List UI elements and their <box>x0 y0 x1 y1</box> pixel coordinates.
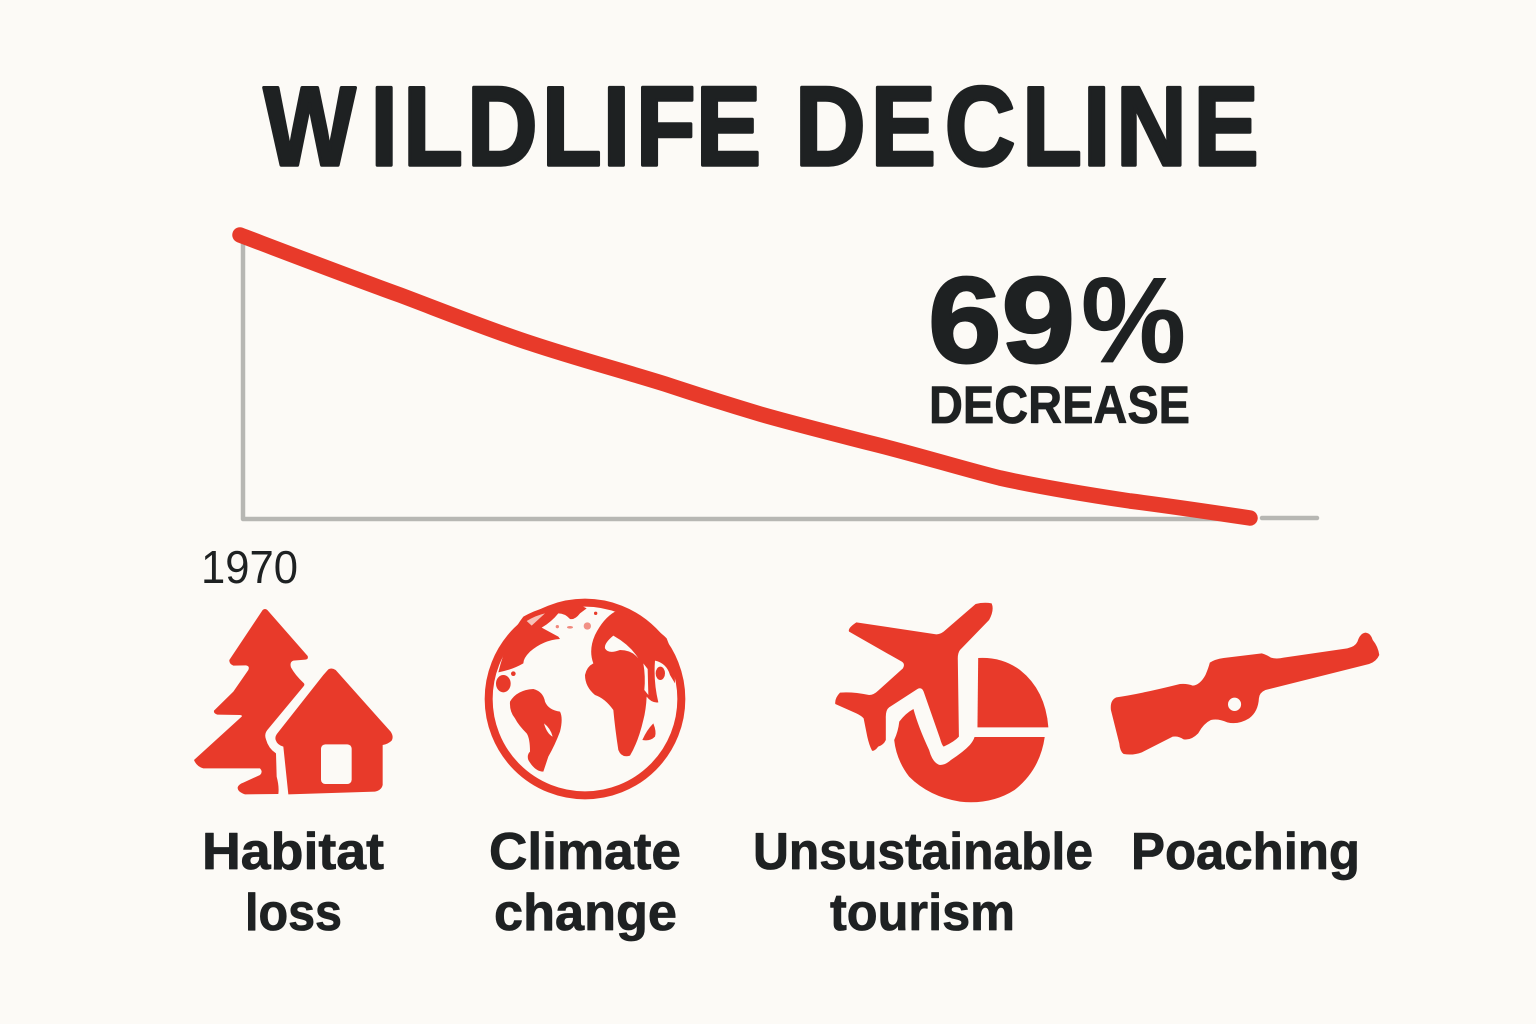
label: unsustainable tourism: tourism <box>830 884 1015 942</box>
label: unsustainable tourism <box>753 823 1093 942</box>
69% figure: 69 <box>928 252 1075 388</box>
label: habitat loss: loss <box>245 884 342 942</box>
icon: tree and house (habitat loss) <box>194 609 393 794</box>
statistic: 69% decrease: % <box>1081 252 1186 388</box>
statistic: 69% decrease <box>928 252 1190 435</box>
chart axes <box>243 240 1317 519</box>
madagascar <box>642 723 656 740</box>
decrease label: DECREASE <box>929 376 1190 435</box>
label: unsustainable tourism: Unsustainable <box>753 823 1093 881</box>
eurasia and africa <box>585 612 675 756</box>
south america <box>510 689 562 772</box>
inland sea cutouts <box>605 636 638 658</box>
line chart: wildlife decline since 1970 <box>240 235 1317 519</box>
label: habitat loss: Habitat <box>202 823 384 881</box>
label: climate change <box>489 823 681 942</box>
icon: globe (climate change) <box>489 603 681 795</box>
title: WILDLIFE DECLINE <box>264 65 1259 190</box>
icon: rifle (poaching) <box>1111 633 1379 755</box>
label: climate change: Climate <box>489 823 681 881</box>
arctic fragments <box>527 613 545 626</box>
decline trend line <box>240 235 1250 518</box>
label: poaching: Poaching <box>1131 823 1360 881</box>
central america island <box>496 675 511 692</box>
axis start year label: 1970 <box>201 541 298 593</box>
icon: airplane and pie chart (unsustainable tourism) <box>835 603 1048 802</box>
label: climate change: change <box>494 884 677 942</box>
label: habitat loss <box>202 823 384 942</box>
north america and arctic <box>498 604 587 672</box>
